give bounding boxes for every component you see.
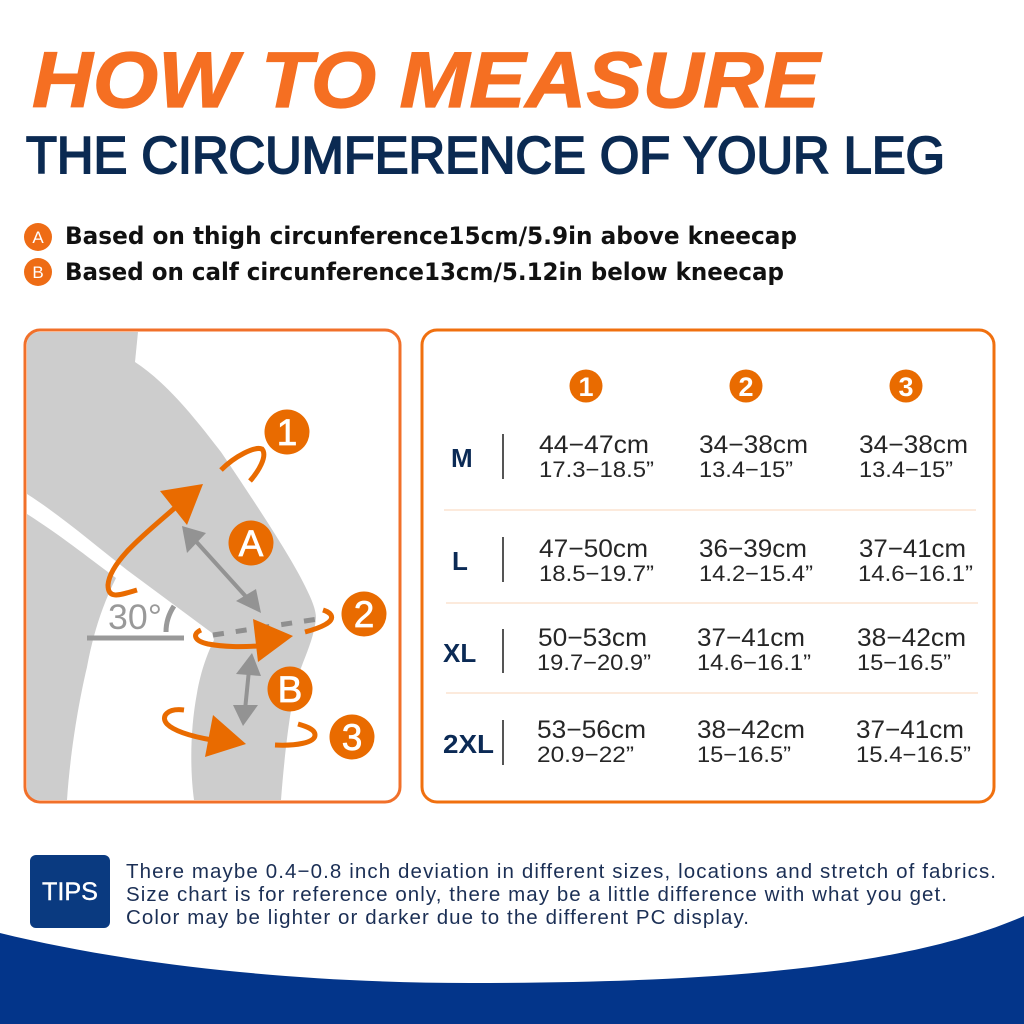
row M: 13.4−15” [859, 457, 953, 482]
row M: 13.4−15” [699, 457, 793, 482]
panel: knee diagram [25, 330, 400, 802]
row 2XL [443, 716, 971, 767]
gray double arrow A [182, 526, 261, 613]
panel border [25, 330, 400, 802]
row XL: 37−41cm [697, 624, 805, 652]
panel: size table [422, 330, 994, 802]
column badge 2 [730, 370, 762, 402]
row 2XL: 2XL [443, 729, 494, 759]
arrow: thigh measurement 1 [108, 448, 264, 595]
30 degree angle marker: 30° [108, 598, 162, 637]
tips badge: TIPS [42, 878, 98, 906]
legend: measurement notes: A [32, 228, 44, 247]
bottom wave band [0, 916, 1024, 1024]
knee dashed line [213, 619, 318, 635]
leg silhouette [27, 332, 316, 800]
badge B: B [278, 669, 302, 710]
row L: 37−41cm [859, 535, 966, 563]
legend: measurement notes: Based on calf circunference13cm/5.12in below kneecap [65, 258, 784, 286]
badge 3: 3 [342, 717, 362, 758]
row L [452, 535, 973, 586]
tips text: Size chart is for reference only, there may be a little difference with what you get. [126, 883, 947, 906]
row M: 34−38cm [859, 431, 968, 459]
row XL: 38−42cm [857, 624, 966, 652]
row XL: 50−53cm [538, 624, 647, 652]
title: how to measure: HOW TO MEASURE [32, 35, 822, 124]
row L: 14.2−15.4” [699, 561, 813, 586]
row L: 36−39cm [699, 535, 807, 563]
row 2XL: 20.9−22” [537, 742, 634, 767]
row L: L [452, 546, 468, 576]
row M: 44−47cm [539, 431, 649, 459]
badge B [268, 666, 312, 712]
tips badge [30, 855, 110, 928]
tips text: There maybe 0.4−0.8 inch deviation in different sizes, locations and stretch of fabrics. [126, 860, 996, 883]
arrow: calf measurement 3 [164, 710, 315, 757]
row M: 34−38cm [699, 431, 808, 459]
table border [422, 330, 994, 802]
column badge 3 [890, 370, 922, 402]
row 2XL: 53−56cm [537, 716, 646, 744]
row L: 18.5−19.7” [539, 561, 654, 586]
row M: M [451, 443, 473, 473]
arrow: knee measurement 2 [196, 610, 332, 662]
subtitle: THE CIRCUMFERENCE OF YOUR LEG [26, 127, 945, 185]
row XL: 15−16.5” [857, 650, 951, 675]
row XL: XL [443, 638, 476, 668]
column badge 1 [570, 370, 602, 402]
column badge 2: 2 [738, 372, 754, 402]
gray double arrow B [233, 653, 261, 726]
column badge 1: 1 [578, 372, 594, 402]
badge 1 [264, 410, 310, 454]
tips text: Color may be lighter or darker due to the different PC display. [126, 906, 749, 929]
badge 2: 2 [354, 594, 374, 635]
row XL [443, 624, 966, 675]
badge 3 [330, 714, 374, 760]
column badge 3: 3 [898, 372, 914, 402]
row M [451, 431, 968, 482]
30 degree angle marker [87, 598, 184, 638]
row L: 47−50cm [539, 535, 648, 563]
badge 2 [342, 592, 386, 636]
badge A [228, 520, 274, 566]
badge 1: 1 [277, 412, 297, 453]
row 2XL: 37−41cm [856, 716, 964, 744]
badge A: A [239, 523, 264, 564]
row 2XL: 15−16.5” [697, 742, 791, 767]
legend: measurement notes: Based on thigh circunference15cm/5.9in above kneecap [65, 222, 797, 250]
legend: measurement notes: B [32, 263, 44, 282]
row XL: 19.7−20.9” [537, 650, 651, 675]
legend: measurement notes [24, 222, 797, 286]
row XL: 14.6−16.1” [697, 650, 811, 675]
row 2XL: 38−42cm [697, 716, 805, 744]
row 2XL: 15.4−16.5” [856, 742, 971, 767]
row L: 14.6−16.1” [858, 561, 973, 586]
tips text [126, 860, 996, 929]
row M: 17.3−18.5” [539, 457, 654, 482]
